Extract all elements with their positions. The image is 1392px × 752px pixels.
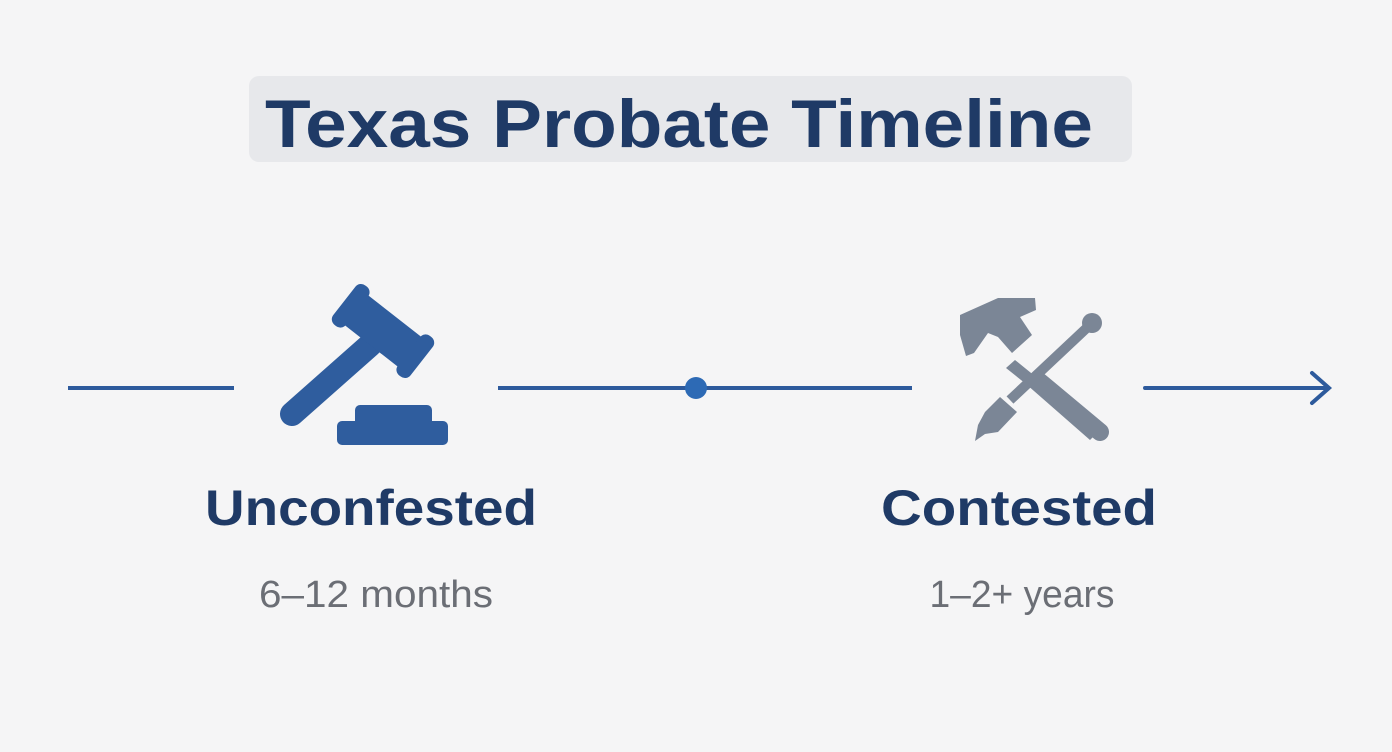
title: Texas Probate Timeline <box>265 86 1093 162</box>
label: Contested: Contested <box>881 480 1157 536</box>
label: Contested: 1–2+ years <box>930 574 1114 616</box>
label: Unconfested: Unconfested <box>205 480 537 536</box>
timeline line middle <box>498 377 912 399</box>
label: Unconfested: 6–12 months <box>259 574 493 616</box>
icon: hammer and tool <box>960 298 1102 441</box>
label: Contested <box>881 480 1157 616</box>
timeline line left <box>68 386 234 390</box>
icon: gavel <box>292 281 448 445</box>
arrow <box>1145 373 1329 403</box>
label: Unconfested <box>205 480 537 616</box>
